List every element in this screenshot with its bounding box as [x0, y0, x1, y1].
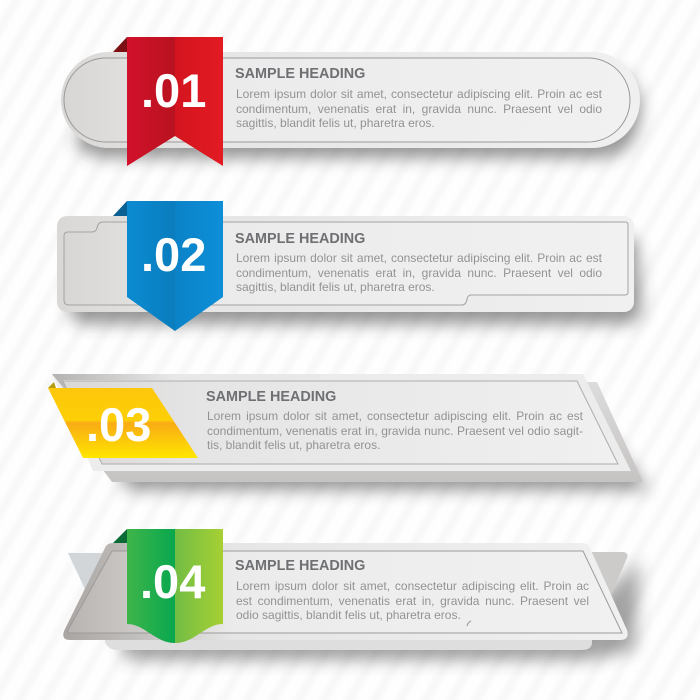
text block — [236, 579, 589, 622]
text block: est condimentum, venenatis erat in, gravida nunc. Praesent vel — [236, 594, 589, 608]
heading: SAMPLE HEADING — [235, 66, 365, 82]
icon: blue ribbon — [113, 201, 223, 331]
text block: tis, blandit felis ut, pharetra eros. — [207, 438, 380, 452]
heading: SAMPLE HEADING — [235, 558, 365, 574]
icon: yellow tag — [48, 382, 198, 458]
text block — [207, 409, 583, 452]
icon: red ribbon — [113, 37, 223, 166]
text block: sagittis, blandit felis ut, pharetra eros. — [236, 116, 435, 130]
text block: Lorem ipsum dolor sit amet, consectetur adipiscing elit. Proin ac — [236, 579, 589, 593]
text block: condimentum, venenatis erat in, gravida nunc. Praesent vel odio — [236, 102, 602, 116]
number 02: .02 — [141, 228, 206, 281]
text block: condimentum, venenatis erat in, gravida nunc. Praesent vel odio sagit- — [207, 424, 583, 438]
number 01: .01 — [141, 64, 206, 117]
panel: banner 03 — [48, 374, 654, 500]
panel: banner 02 — [57, 201, 652, 334]
text block: Lorem ipsum dolor sit amet, consectetur adipiscing elit. Proin ac est — [207, 409, 583, 423]
text block: sagittis, blandit felis ut, pharetra eros. — [236, 280, 435, 294]
text block: odio sagittis, blandit felis ut, pharetra eros. — [236, 608, 461, 622]
text block — [236, 251, 602, 294]
text block: Lorem ipsum dolor sit amet, consectetur adipiscing elit. Proin ac est — [236, 87, 602, 101]
icon: green ribbon — [113, 529, 223, 643]
number 04: .04 — [140, 555, 205, 608]
text block: Lorem ipsum dolor sit amet, consectetur adipiscing elit. Proin ac est — [236, 251, 602, 265]
number 03: .03 — [86, 398, 151, 451]
text block: condimentum, venenatis erat in, gravida nunc. Praesent vel odio — [236, 266, 602, 280]
heading: SAMPLE HEADING — [235, 231, 365, 247]
text block — [236, 87, 602, 130]
heading: SAMPLE HEADING — [206, 389, 336, 405]
panel: banner 01 — [61, 37, 651, 168]
